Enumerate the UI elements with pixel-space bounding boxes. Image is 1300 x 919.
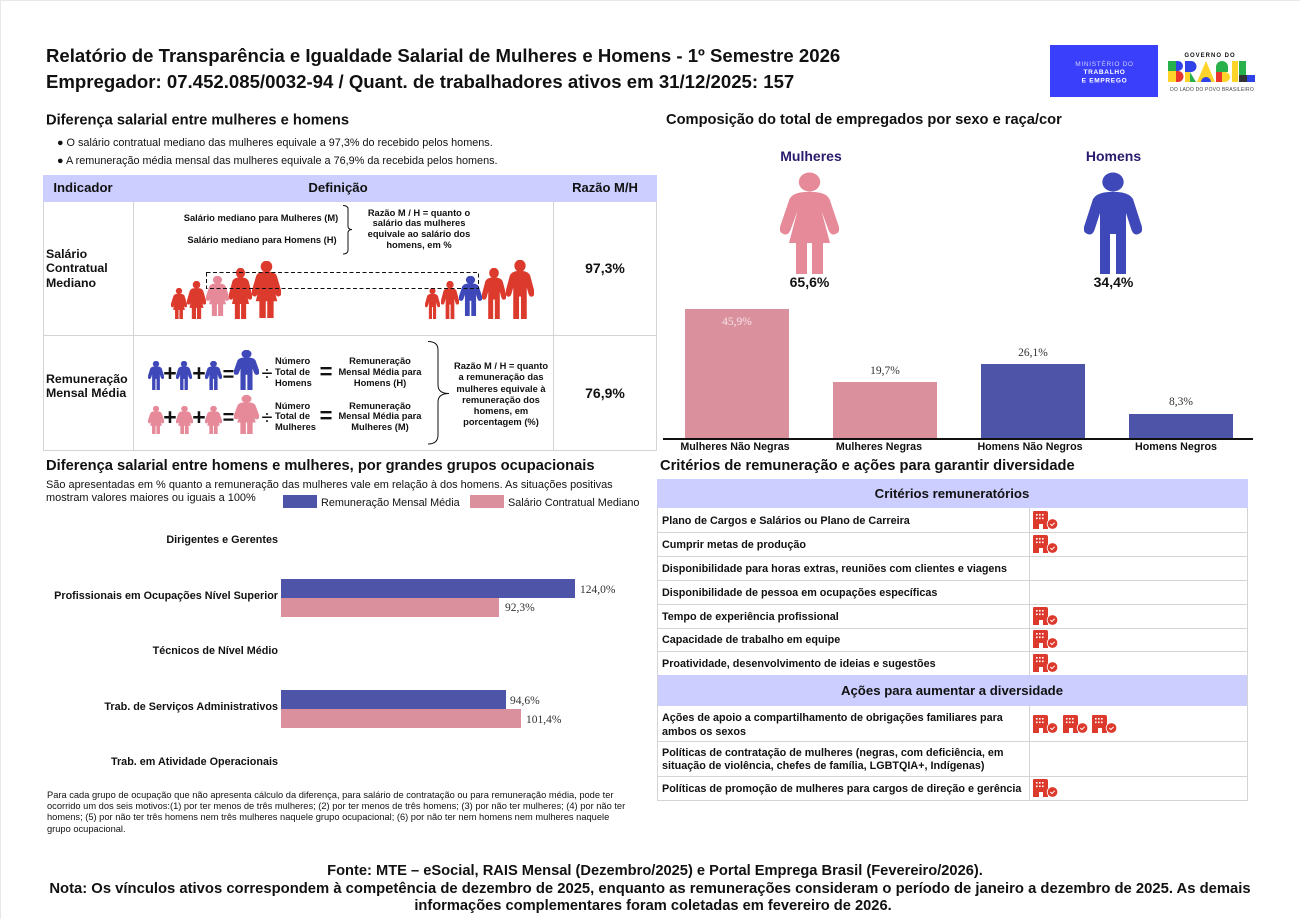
ícones: empresa com selo [1033,511,1117,797]
linhas de critérios: Cumprir metas de produção [662,539,806,551]
coluna: mulheres não negras [685,309,789,439]
logo: Ministério do Trabalho e Emprego: E EMPREGO [1082,78,1127,84]
text: razão: mulheres equivale à [456,384,546,394]
mulheres ordenadas por salário [171,261,281,319]
barras: administrativos: 94,6% [510,695,540,707]
brace [428,342,449,444]
número total: Total de [275,367,310,377]
coluna: homens não negros [981,347,1085,439]
operadores: = [223,364,234,386]
barras: profissionais: 92,3% [505,602,535,614]
legenda: Remuneração Mensal Média [321,497,461,509]
coluna: homens negros: 8,3% [1169,396,1193,408]
operadores: + [163,404,177,430]
row label: remuneração mensal média: Mensal Média [46,386,126,400]
heading: composição: Composição do total de empregados por sexo e raça/cor [666,112,1062,128]
resultado: Remuneração [349,356,411,366]
linhas de critérios: Políticas de promoção de mulheres para cargos de direção e gerência [662,783,1022,795]
figura: homens: 34,4% [1094,274,1134,290]
nota de rodapé do gráfico: ocorrido um dos seis motivos:(1) por ter menos de três mulheres; (2) por ter menos de três homens; (3) por não ter mulheres; (4) por não ter [47,801,625,811]
figura: homens [1084,148,1142,290]
text: razão: Razão M / H = quanto o [368,208,470,218]
heading: diferença salarial: Diferença salarial entre mulheres e homens [46,112,349,128]
text: razão: porcentagem (%) [463,417,539,427]
linhas de critérios: ambos os sexos [662,726,746,738]
linhas de critérios: Disponibilidade de pessoa em ocupações específicas [662,587,937,599]
text: razão: Razão M / H = quanto [454,361,548,371]
rótulos dos grupos: Trab. em Atividade Operacionais [111,756,278,768]
fonte e nota: Fonte: MTE – eSocial, RAIS Mensal (Dezembro/2025) e Portal Emprega Brasil (Fevereiro/2026). [327,863,983,879]
coluna: mulheres não negras: 45,9% [722,316,752,328]
linhas de critérios: Proatividade, desenvolvimento de ideias e sugestões [662,658,936,670]
text: razão: salário das mulheres [373,218,465,228]
row label: salário contratual mediano: Mediano [46,276,97,290]
resultado: Mensal Média para [339,367,422,377]
rótulos: Mulheres Não Negras [680,441,790,453]
operadores: + [192,404,206,430]
rótulos [680,441,1217,453]
title [46,45,840,92]
nota de rodapé do gráfico [47,790,625,834]
figura: mulheres: 65,6% [790,274,830,290]
logo: Ministério do Trabalho e Emprego: TRABALHO [1083,69,1126,76]
header: ações: Ações para aumentar a diversidade [841,683,1063,698]
rótulos: Homens Negros [1135,441,1217,453]
text block: explicação [46,479,613,504]
fonte e nota [49,863,1251,914]
linhas de critérios: Disponibilidade para horas extras, reuniões com clientes e viagens [662,563,1007,575]
text: razão: homens, em % [386,240,452,250]
row label: remuneração mensal média [46,372,128,400]
row label: remuneração mensal média: Remuneração [46,372,128,386]
definição: remuneração média [148,342,548,444]
text: razão [454,361,548,427]
operadores: = [223,407,234,429]
logo: Ministério do Trabalho e Emprego [1050,45,1158,97]
rótulos dos grupos: Profissionais em Ocupações Nível Superior [54,590,279,602]
linhas de critérios: Ações de apoio a compartilhamento de obrigações familiares para [662,712,1004,724]
logo: Governo do Brasil: GOVERNO DO [1184,53,1236,59]
rótulos dos grupos: Técnicos de Nível Médio [153,645,278,657]
definição: salário mediano: Salário mediano para Homens (H) [187,235,337,245]
figura: mulheres [780,148,842,290]
linhas de critérios: Políticas de contratação de mulheres (negras, com deficiência, em [662,747,1003,759]
operadores: = [320,403,332,428]
value: 97,3%: 97,3% [585,260,625,276]
heading: critérios: Critérios de remuneração e ações para garantir diversidade [660,458,1075,474]
text block: bullets [57,137,498,167]
row label: salário contratual mediano: Contratual [46,261,108,275]
logo: Governo do Brasil: DO LADO DO POVO BRASILEIRO [1170,87,1254,93]
número total [275,356,316,432]
definição: salário mediano: Salário mediano para Mulheres (M) [184,213,338,223]
resultado: Mulheres (M) [351,422,409,432]
número total: Homens [275,378,312,388]
operadores: + [163,360,177,386]
row label: salário contratual mediano: Salário [46,247,88,261]
rótulos dos grupos [54,534,279,768]
legenda: Salário Contratual Mediano [508,497,639,509]
número total: Número [275,356,311,366]
panel: tabela de indicadores [43,175,657,450]
nota de rodapé do gráfico: grupo ocupacional. [47,824,126,834]
value: 76,9%: 76,9% [585,385,625,401]
linhas de critérios: Tempo de experiência profissional [662,611,839,623]
text block: explicação: mostram valores maiores ou iguais a 100% [46,492,256,504]
linhas de critérios: situação de violência, chefes de família, LGBTQIA+, Indígenas) [662,760,985,772]
coluna: mulheres negras: 19,7% [870,365,900,377]
header: definição: Definição [308,180,368,195]
eixo [663,438,1253,440]
linhas de critérios: Capacidade de trabalho em equipe [662,634,840,646]
title: Empregador: 07.452.085/0032-94 / Quant. de trabalhadores ativos em 31/12/2025: 157 [46,71,794,92]
text: razão: a remuneração das [458,372,544,382]
text block: bullets: ● A remuneração média mensal das mulheres equivale a 76,9% da recebida pelos homens. [57,155,498,167]
nota de rodapé do gráfico: Para cada grupo de ocupação que não apresenta cálculo da diferença, para salário de contratação ou para remuneração média, pode ter [47,790,613,800]
rótulos dos grupos: Dirigentes e Gerentes [166,534,278,546]
operadores: ÷ [262,363,273,385]
operadores: + [192,360,206,386]
rótulos: Homens Não Negros [977,441,1083,453]
gráfico de barras: grupos ocupacionais [54,534,616,768]
resultado: Homens (H) [354,378,406,388]
gráfico de colunas [663,309,1253,453]
header: razão: Razão M/H [572,180,638,195]
text: razão: remuneração dos [462,395,540,405]
resultado: Remuneração [349,401,411,411]
text block: explicação: São apresentadas em % quanto a remuneração das mulheres vale em relação à dos homens. As situações positivas [46,479,613,491]
homens ordenados por salário [425,260,534,319]
text block: bullets: ● O salário contratual mediano das mulheres equivale a 97,3% do recebido pelos homens. [57,137,493,149]
rótulos: Mulheres Negras [836,441,922,453]
resultado [339,356,422,432]
heading: grupos ocupacionais: Diferença salarial entre homens e mulheres, por grandes grupos ocupacionais [46,458,595,474]
barras: administrativos [281,690,562,728]
title: Relatório de Transparência e Igualdade Salarial de Mulheres e Homens - 1º Semestre 2026 [46,45,840,66]
homens somados [148,350,259,390]
linhas de critérios: Plano de Cargos e Salários ou Plano de Carreira [662,515,911,527]
fonte e nota: Nota: Os vínculos ativos correspondem à competência de dezembro de 2025, enquanto as remunerações consideram o período de janeiro a dezembro de 2025. As demais [49,881,1251,897]
rótulos dos grupos: Trab. de Serviços Administrativos [104,701,278,713]
text: razão [368,208,470,250]
text: razão: equivale ao salário dos [368,229,470,239]
linhas de critérios [662,515,1022,795]
mulheres somadas [148,395,259,434]
operadores [163,359,332,430]
operadores: ÷ [262,407,273,429]
operadores: = [320,359,332,384]
figura: homens: Homens [1086,148,1141,164]
figura: mulheres: Mulheres [780,148,842,164]
número total: Mulheres [275,422,316,432]
coluna: homens negros [1129,396,1233,439]
header: critérios remuneratórios: Critérios remuneratórios [875,486,1029,501]
coluna: mulheres negras [833,365,937,439]
barras: profissionais [281,579,616,617]
legenda [283,495,639,509]
coluna: homens não negros: 26,1% [1018,347,1048,359]
barras: administrativos: 101,4% [526,714,562,726]
panel: critérios e ações [657,479,1248,800]
logo: Ministério do Trabalho e Emprego: MINISTÉRIO DO [1075,59,1134,68]
número total: Total de [275,411,310,421]
faixa da mediana [206,272,478,288]
text: razão: homens, em [474,406,528,416]
barras: profissionais: 124,0% [580,584,616,596]
header: indicador: Indicador [53,180,113,195]
row label: salário contratual mediano [46,247,108,290]
fonte e nota: informações complementares foram coletadas em fevereiro de 2026. [414,898,892,914]
logo: Governo do Brasil [1168,53,1255,93]
número total: Número [275,401,311,411]
definição: salário mediano [171,206,534,319]
resultado: Mensal Média para [339,411,422,421]
brace [343,206,352,254]
nota de rodapé do gráfico: homens; (5) por não ter três homens nem três mulheres naquele grupo ocupacional; (6) por não ter nem homens nem mulheres naquele [47,812,609,822]
